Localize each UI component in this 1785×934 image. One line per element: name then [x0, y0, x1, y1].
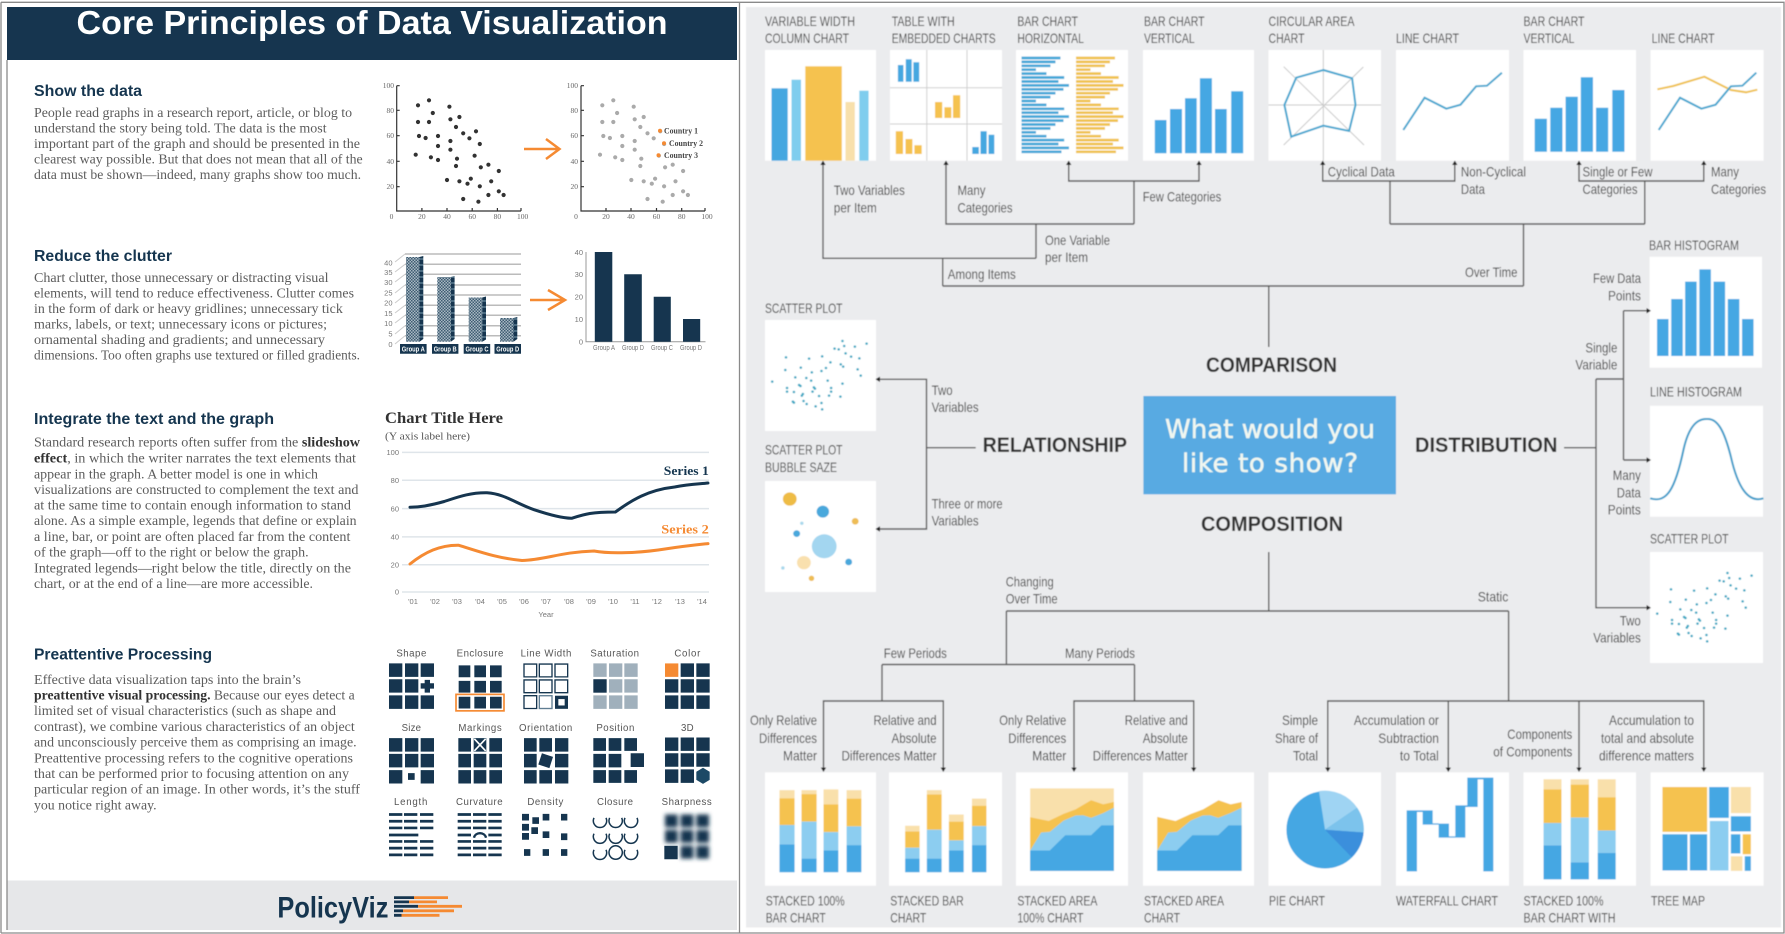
chart titles: WATERFALL CHART — [1396, 892, 1498, 908]
chart: clean bars: 0 — [579, 338, 583, 346]
arrow: show the data — [524, 139, 560, 159]
chart titles: BAR CHART — [766, 910, 826, 926]
chart: integrated line chart — [385, 410, 709, 619]
branch labels: Variables — [1593, 630, 1641, 646]
chart: integrated line chart: '10 — [608, 597, 618, 606]
footer: PolicyViz logo: PolicyViz — [277, 892, 388, 924]
heading: reduce the clutter: Reduce the clutter — [34, 248, 172, 265]
title banner: Core Principles of Data Visualization — [76, 4, 668, 41]
grid: length: Length — [394, 797, 427, 808]
connector lines and arrows — [820, 160, 1707, 772]
text block: reduce the clutter: ornamental shading and gradients; and unnecessary — [34, 332, 325, 347]
text block: integrate: chart, or at the end of a line—are more accessible. — [34, 576, 313, 591]
branch labels: of Components — [1493, 744, 1572, 760]
chart: integrated line chart: '01 — [408, 597, 418, 606]
chart: waterfall — [1407, 778, 1493, 871]
chart: integrated line chart: '06 — [519, 597, 529, 606]
chart: distribution scatter — [1657, 573, 1752, 641]
chart: integrated line chart: Series 1 — [664, 463, 709, 478]
title banner — [7, 4, 737, 60]
chart: clean bars — [575, 248, 706, 352]
text block: preattentive processing: Preattentive processing refers to the cognitive operations — [34, 750, 353, 766]
grid: sharpness — [662, 797, 712, 859]
chart: cluttered scatter: 0 — [390, 212, 394, 221]
chart: highlighted scatter: 20 — [570, 182, 578, 191]
chart: integrated line chart: '02 — [430, 597, 440, 606]
grid: position: Position — [596, 723, 634, 734]
branch labels: Two — [1620, 612, 1641, 628]
branch labels: Absolute — [1143, 730, 1188, 746]
branch labels: Differences — [1008, 730, 1066, 746]
branch labels: Changing — [1006, 574, 1054, 590]
chart: clean bars: Group C — [651, 343, 673, 352]
central question box: like to show? — [1182, 449, 1358, 479]
text block: preattentive processing: contrast), we combine various characteristics of an object — [34, 719, 355, 734]
chart: cluttered 3D bars — [384, 254, 521, 354]
grid: color — [665, 648, 710, 709]
chart: tree map — [1662, 787, 1751, 871]
branch labels: Only Relative — [750, 712, 817, 728]
chart: cluttered scatter: 20 — [418, 212, 426, 221]
chart: highlighted scatter: Country 3 — [664, 151, 698, 160]
chart: line histogram — [1650, 419, 1763, 499]
chart: stacked 100% bars — [779, 789, 861, 872]
branch labels: Cyclical Data — [1328, 164, 1395, 180]
heading: integrate the text and the graph: Integrate the text and the graph — [34, 411, 274, 428]
chart titles: LINE CHART — [1396, 30, 1459, 46]
chart: cluttered scatter: 20 — [386, 182, 394, 191]
chart titles: BAR CHART WITH — [1524, 910, 1616, 926]
chart: integrated line chart: '09 — [586, 597, 596, 606]
chart: integrated line chart: Chart Title Here — [385, 410, 503, 427]
chart: cluttered 3D bars: 40 — [384, 258, 392, 268]
grid: markings — [458, 723, 502, 784]
grid: length — [389, 797, 433, 856]
chart: cluttered 3D bars: 35 — [384, 268, 392, 277]
chart: highlighted scatter: Country 2 — [669, 139, 703, 148]
chart: scatter plot — [772, 341, 867, 409]
branch labels: Few Data — [1593, 270, 1641, 286]
text block: reduce the clutter — [34, 270, 360, 362]
grid: size: Size — [402, 723, 421, 734]
branch labels: Variables — [932, 513, 979, 529]
branch labels: to Total — [1400, 748, 1439, 764]
chart titles: STACKED 100% — [766, 892, 845, 908]
chart: highlighted scatter: 0 — [574, 212, 578, 221]
branch labels: Data — [1461, 181, 1485, 197]
chart: integrated line chart: Year — [538, 610, 554, 619]
white chart tiles — [765, 50, 1764, 886]
chart titles: CHART — [890, 910, 927, 926]
preattentive attribute grids — [389, 648, 712, 859]
chart: clean bars: 40 — [575, 248, 583, 257]
heading: comparison: COMPARISON — [1206, 354, 1337, 377]
chart titles: BAR HISTOGRAM — [1649, 237, 1739, 253]
branch labels: Differences Matter — [842, 748, 937, 764]
grid: orientation — [519, 723, 572, 784]
chart titles: TABLE WITH — [892, 13, 955, 29]
branch labels: Many — [1711, 164, 1739, 180]
grid: 3D: 3D — [681, 723, 694, 734]
chart: integrated line chart: 60 — [391, 504, 399, 514]
central question box: What would you — [1165, 415, 1375, 445]
chart: integrated line chart: 100 — [386, 448, 399, 457]
text block: preattentive processing: that can be performed prior to focusing attention on any — [34, 766, 349, 781]
chart titles: 100% CHART — [1017, 910, 1084, 926]
chart: cluttered scatter: 40 — [386, 157, 394, 166]
chart titles: STACKED BAR — [890, 892, 964, 908]
chart: integrated line chart: (Y axis label here) — [385, 432, 471, 442]
text block: show the data: clearest way possible. But that does not mean that all of the — [34, 152, 363, 166]
chart titles: TREE MAP — [1651, 892, 1705, 908]
chart: highlighted scatter: 80 — [678, 212, 686, 221]
text block: show the data: People read graphs in a research report, article, or blog to — [34, 105, 352, 120]
chart: cluttered scatter: 100 — [383, 81, 394, 90]
text block: integrate: a line, bar, or point are often placed far from the content — [34, 529, 351, 544]
branch labels: Share of — [1275, 730, 1318, 746]
chart titles: COLUMN CHART — [765, 30, 849, 46]
branch labels: Variables — [932, 399, 979, 415]
chart titles: SCATTER PLOT — [765, 300, 843, 316]
chart: cluttered 3D bars: Group C — [466, 346, 488, 354]
chart titles: VERTICAL — [1524, 30, 1575, 46]
branch labels: Accumulation or — [1354, 712, 1439, 728]
branch labels: Differences Matter — [1093, 748, 1188, 764]
chart: stacked area 100% — [1030, 788, 1114, 871]
chart titles: SCATTER PLOT — [765, 441, 843, 457]
grid: color: Color — [674, 648, 701, 659]
chart titles: EMBEDDED CHARTS — [892, 30, 996, 46]
text block: reduce the clutter: elements, will tend to reduce effectiveness. Clutter comes — [34, 286, 354, 300]
text block: integrate: effect, in which the writer narrates the text elements that — [34, 450, 356, 466]
chart: highlighted scatter: 60 — [570, 131, 578, 140]
text block: show the data: data must be shown—indeed, many graphs show too much. — [34, 167, 361, 182]
branch labels: Categories — [1582, 181, 1638, 197]
grid: density — [522, 797, 567, 856]
chart: highlighted scatter: 40 — [627, 212, 635, 221]
text block: preattentive processing: Effective data visualization taps into the brain’s — [34, 672, 301, 687]
branch labels: Differences — [759, 730, 817, 746]
chart: cluttered 3D bars: 5 — [388, 330, 392, 339]
text block: reduce the clutter: Chart clutter, those unnecessary or distracting visual — [34, 270, 329, 285]
grid: line width — [521, 648, 571, 709]
branch labels: Two — [932, 382, 953, 398]
chart: cluttered 3D bars: 0 — [388, 340, 392, 349]
chart: horizontal bars — [1022, 58, 1124, 152]
branch labels: Relative and — [1125, 712, 1188, 728]
chart: clean bars: Group D — [680, 343, 702, 352]
chart: highlighted scatter: 100 — [701, 212, 713, 221]
branch labels: Three or more — [932, 496, 1003, 512]
grid: curvature — [456, 797, 503, 856]
chart: vertical bars over time — [1535, 77, 1624, 152]
chart titles: SCATTER PLOT — [1650, 530, 1729, 546]
text block: reduce the clutter: dimensions. Too often graphs use textured or filled gradients. — [34, 348, 360, 362]
panel: core principles — [7, 4, 739, 930]
chart: cluttered scatter: 60 — [468, 212, 476, 221]
chart: cluttered 3D bars: Group A — [402, 346, 425, 354]
grid: curvature: Curvature — [456, 797, 503, 808]
chart: cluttered scatter — [383, 81, 528, 221]
branch labels: Many — [958, 182, 986, 198]
chart: cluttered scatter: 60 — [386, 131, 394, 140]
chart: cluttered 3D bars: 20 — [384, 299, 392, 308]
branch labels: Data — [1617, 484, 1641, 500]
text block: preattentive processing: preattentive visual processing. Because our eyes detect a — [34, 688, 355, 703]
branch labels: Over Time — [1465, 264, 1518, 280]
chart: single line — [1403, 73, 1502, 130]
branch labels: Accumulation to — [1609, 712, 1694, 728]
chart: integrated line chart: Series 2 — [661, 522, 709, 536]
text block: show the data: important part of the graph and should be presented in the — [34, 136, 360, 151]
heading: distribution: DISTRIBUTION — [1415, 434, 1557, 457]
grid: orientation: Orientation — [519, 723, 572, 734]
grid: line width: Line Width — [521, 648, 571, 659]
grid: shape — [389, 648, 434, 709]
branch labels: Non-Cyclical — [1461, 164, 1526, 180]
chart: highlighted scatter: 20 — [602, 212, 610, 221]
text block: reduce the clutter: marks, labels, or text; unnecessary icons or pictures; — [34, 316, 327, 332]
chart: integrated line chart: '08 — [564, 597, 574, 606]
chart titles: STACKED AREA — [1017, 892, 1098, 908]
branch labels: Few Periods — [884, 645, 947, 661]
chart titles: CHART — [1268, 30, 1305, 46]
chart titles: STACKED AREA — [1144, 892, 1224, 908]
branch labels: Many Periods — [1065, 645, 1135, 661]
chart: integrated line chart: 20 — [391, 560, 399, 570]
text block: preattentive processing: and unconsciously perceive them as comprising an image. — [34, 734, 357, 750]
text block: preattentive processing: limited set of visual characteristics (such as shape and — [34, 703, 336, 718]
chart titles: BAR CHART — [1017, 13, 1078, 29]
chart: table with embedded charts — [890, 50, 1002, 161]
branch labels: Two Variables — [834, 182, 905, 198]
text block: integrate: appear in the graph. A better model is one in which — [34, 466, 318, 481]
branch labels: Only Relative — [999, 712, 1066, 728]
text block: integrate: of the graph—off to the right or below the graph. — [34, 544, 309, 560]
chart: highlighted scatter: 100 — [567, 81, 578, 90]
chart: clean bars: Group D — [622, 343, 644, 352]
chart: clean bars: 20 — [575, 292, 583, 302]
heading: preattentive processing: Preattentive Processing — [34, 646, 212, 664]
chart titles: PIE CHART — [1269, 892, 1325, 908]
chart titles — [765, 13, 1742, 926]
chart: clean bars: Group A — [593, 343, 615, 352]
branch labels: Categories — [958, 200, 1012, 216]
branch labels: difference matters — [1599, 748, 1694, 764]
text block: preattentive processing — [34, 672, 361, 812]
chart: cluttered 3D bars: Group D — [496, 346, 519, 354]
chart: clean bars: 30 — [575, 270, 583, 279]
branch labels: per Item — [834, 200, 877, 216]
chart: highlighted scatter: 80 — [570, 106, 578, 115]
branch labels: Matter — [1032, 748, 1067, 764]
text block: integrate: Integrated legends—right below the title, directly on the — [34, 560, 351, 576]
grid: enclosure: Enclosure — [457, 648, 503, 659]
branch labels: Variable — [1575, 357, 1618, 373]
chart titles: VARIABLE WIDTH — [765, 13, 855, 29]
grid: sharpness: Sharpness — [662, 797, 712, 808]
grid: 3D — [665, 723, 710, 784]
chart titles: STACKED 100% — [1524, 892, 1604, 908]
branch labels: Points — [1608, 502, 1641, 518]
chart: integrated line chart: '11 — [630, 597, 640, 606]
branch labels: Static — [1478, 589, 1508, 605]
branch labels: Simple — [1282, 712, 1318, 728]
text block: show the data — [34, 105, 363, 182]
chart: bar histogram — [1657, 269, 1754, 356]
branch labels: Components — [1507, 726, 1572, 742]
chart: pie — [1286, 791, 1364, 868]
branch labels: Over Time — [1006, 591, 1058, 607]
grid: saturation — [590, 648, 639, 709]
text block: integrate: visualizations are constructed to complement the text and — [34, 482, 359, 497]
chart: integrated line chart: '05 — [497, 597, 507, 606]
chart: stacked area — [1157, 800, 1242, 871]
chart: highlighted scatter: 60 — [653, 212, 660, 221]
chart: highlighted scatter: 40 — [570, 157, 578, 166]
chart: multi line — [1657, 73, 1757, 130]
chart: integrated line chart: '04 — [475, 597, 485, 606]
grid: density: Density — [527, 797, 563, 808]
branch labels: Points — [1608, 288, 1641, 304]
chart: cluttered scatter: 80 — [386, 106, 394, 115]
branch labels: Single or Few — [1582, 164, 1653, 180]
branch labels: Categories — [1711, 181, 1766, 197]
branch labels: Absolute — [892, 730, 937, 746]
chart: integrated line chart: '12 — [652, 597, 662, 606]
chart titles: BAR CHART — [1524, 13, 1585, 29]
chart: stacked bars — [905, 790, 986, 872]
branch labels: Single — [1585, 339, 1618, 355]
chart: cluttered scatter: 100 — [517, 212, 528, 221]
branch labels: total and absolute — [1601, 730, 1694, 746]
chart: cluttered 3D bars: Group B — [434, 346, 457, 354]
text block: preattentive processing: you notice right away. — [34, 798, 157, 812]
chart: cluttered 3D bars: 25 — [384, 288, 392, 298]
chart titles: BAR CHART — [1144, 13, 1205, 29]
heading: show the data: Show the data — [34, 83, 142, 100]
chart: integrated line chart: '07 — [541, 597, 551, 606]
branch labels — [750, 164, 1766, 763]
text block: integrate: alone. As a simple example, legends that define or explain — [34, 513, 357, 528]
chart: highlighted scatter — [567, 81, 713, 221]
grid: markings: Markings — [458, 723, 502, 734]
text block: show the data: understand the story being told. The data is the most — [34, 120, 327, 136]
chart titles: LINE HISTOGRAM — [1650, 384, 1742, 400]
branch labels: Among Items — [948, 266, 1016, 282]
grid: closure — [593, 797, 638, 859]
grid: saturation: Saturation — [590, 648, 639, 659]
heading: relationship: RELATIONSHIP — [983, 434, 1127, 457]
chart: integrated line chart: '14 — [697, 597, 707, 606]
chart: clean bars: 10 — [575, 315, 583, 324]
branch labels: per Item — [1045, 249, 1088, 265]
chart: cluttered 3D bars: 15 — [384, 309, 392, 318]
chart titles: LINE CHART — [1652, 30, 1715, 46]
chart: bubble scatter — [781, 492, 859, 581]
chart: radar — [1268, 50, 1381, 161]
chart titles: VERTICAL — [1144, 30, 1195, 46]
grid: position — [593, 723, 644, 783]
chart: cluttered 3D bars: 30 — [384, 278, 392, 287]
grid: closure: Closure — [597, 797, 633, 808]
text block: integrate: at the same time to contain enough information to stand — [34, 497, 351, 512]
chart: integrated line chart: '03 — [452, 597, 462, 606]
chart: integrated line chart: 0 — [395, 588, 399, 596]
grid: enclosure — [456, 648, 504, 711]
text block: integrate — [34, 434, 360, 591]
branch labels: Many — [1613, 467, 1641, 483]
branch labels: Subtraction — [1378, 730, 1439, 746]
branch labels: Few Categories — [1143, 189, 1221, 205]
text block: reduce the clutter: in the form of dark or heavy gridlines; unnecessary tick — [34, 301, 343, 316]
branch labels: One Variable — [1045, 232, 1110, 248]
chart titles: HORIZONTAL — [1017, 30, 1084, 46]
chart: variable width column — [772, 66, 869, 161]
chart: stacked 100% with components — [1544, 779, 1616, 879]
branch labels: Matter — [783, 748, 817, 764]
chart: integrated line chart: 80 — [391, 476, 399, 485]
grid: shape: Shape — [396, 648, 426, 659]
grid: size — [389, 723, 434, 784]
chart: vertical bars — [1155, 78, 1243, 153]
text block: preattentive processing: particular region of an image. In other words, it’s the stuff — [34, 782, 361, 797]
footer: PolicyViz logo — [7, 880, 737, 930]
chart titles: CIRCULAR AREA — [1268, 13, 1355, 29]
panel: chart chooser — [746, 7, 1781, 928]
chart: integrated line chart: '13 — [675, 597, 685, 606]
chart: cluttered 3D bars: 10 — [384, 319, 392, 328]
branch labels: Total — [1293, 748, 1318, 764]
chart: highlighted scatter: Country 1 — [664, 126, 698, 136]
chart: integrated line chart: 40 — [391, 532, 399, 542]
chart: cluttered scatter: 80 — [494, 212, 501, 221]
text block: integrate: Standard research reports often suffer from the slideshow — [34, 434, 360, 450]
chart: cluttered scatter: 40 — [443, 212, 451, 221]
branch labels: Relative and — [874, 712, 936, 728]
chart titles: BUBBLE SAZE — [765, 459, 837, 475]
heading: composition: COMPOSITION — [1201, 513, 1343, 536]
arrow: reduce the clutter — [530, 290, 565, 310]
central question box — [1143, 396, 1396, 494]
chart titles: CHART — [1144, 910, 1180, 926]
